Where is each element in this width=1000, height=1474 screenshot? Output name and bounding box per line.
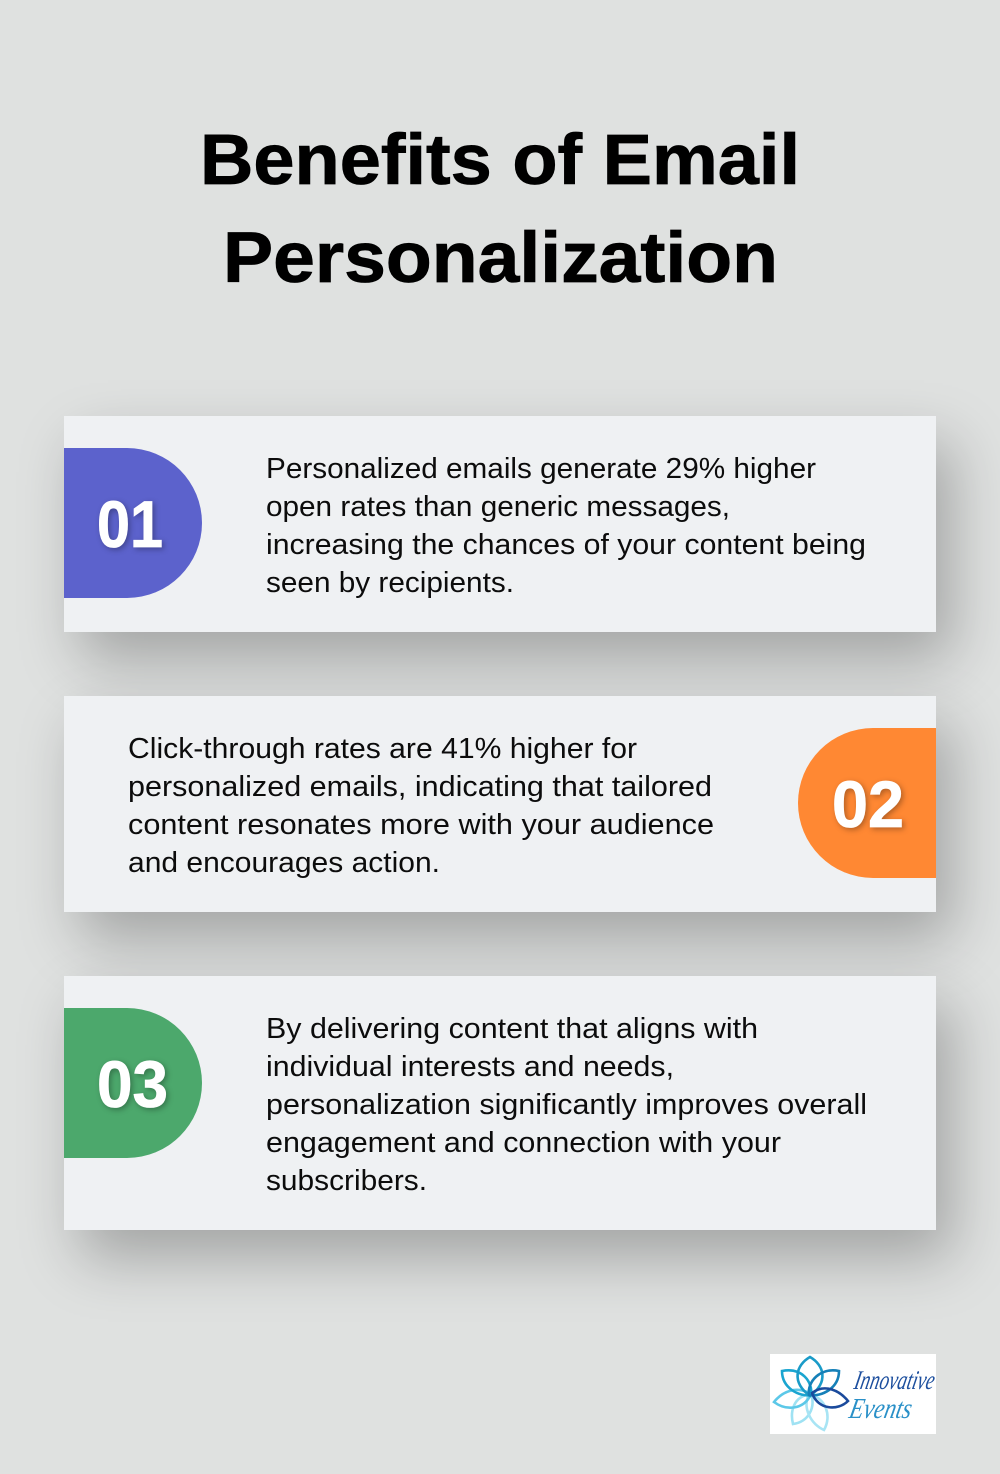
text: benefit 01 description: seen by recipients. [266,567,514,599]
text: benefit 02 description: content resonates more with your audience [128,809,714,841]
title [200,121,800,298]
text: benefit 02 description: and encourages action. [128,847,440,879]
text: benefit 03 description: personalization significantly improves overall [266,1089,867,1121]
badge: 02 [798,728,936,878]
badge: 01: 01 [97,487,163,561]
text: benefit 03 description: engagement and connection with your [266,1127,781,1159]
logo wordmark [846,1365,938,1425]
panel: benefit 03 engagement [64,976,936,1230]
logo: Innovative Events [770,1354,936,1434]
text: benefit 02 description: personalized emails, indicating that tailored [128,771,712,803]
icon: flower of seven petals [774,1357,848,1430]
badge: 01 [64,448,202,598]
panel: benefit 02 click-through rates [64,696,936,912]
badge: 03: 03 [97,1047,168,1121]
text: benefit 03 description: individual interests and needs, [266,1051,674,1083]
text: benefit 02 description: Click-through rates are 41% higher for [128,733,637,765]
logo wordmark: Events [846,1393,915,1425]
panel: benefit 01 open rates [64,416,936,632]
text: benefit 02 description [128,733,714,879]
title: Benefits of Email [200,121,800,200]
badge: 02: 02 [832,767,904,841]
text: benefit 01 description: Personalized emails generate 29% higher [266,453,816,485]
logo wordmark: Innovative [851,1365,938,1395]
text: benefit 03 description: By delivering content that aligns with [266,1013,758,1045]
badge: 03 [64,1008,202,1158]
text: benefit 01 description [266,453,866,599]
title: Personalization [223,219,778,298]
text: benefit 01 description: increasing the chances of your content being [266,529,866,561]
text: benefit 03 description: subscribers. [266,1165,427,1197]
text: benefit 01 description: open rates than generic messages, [266,491,730,523]
text: benefit 03 description [266,1013,867,1197]
